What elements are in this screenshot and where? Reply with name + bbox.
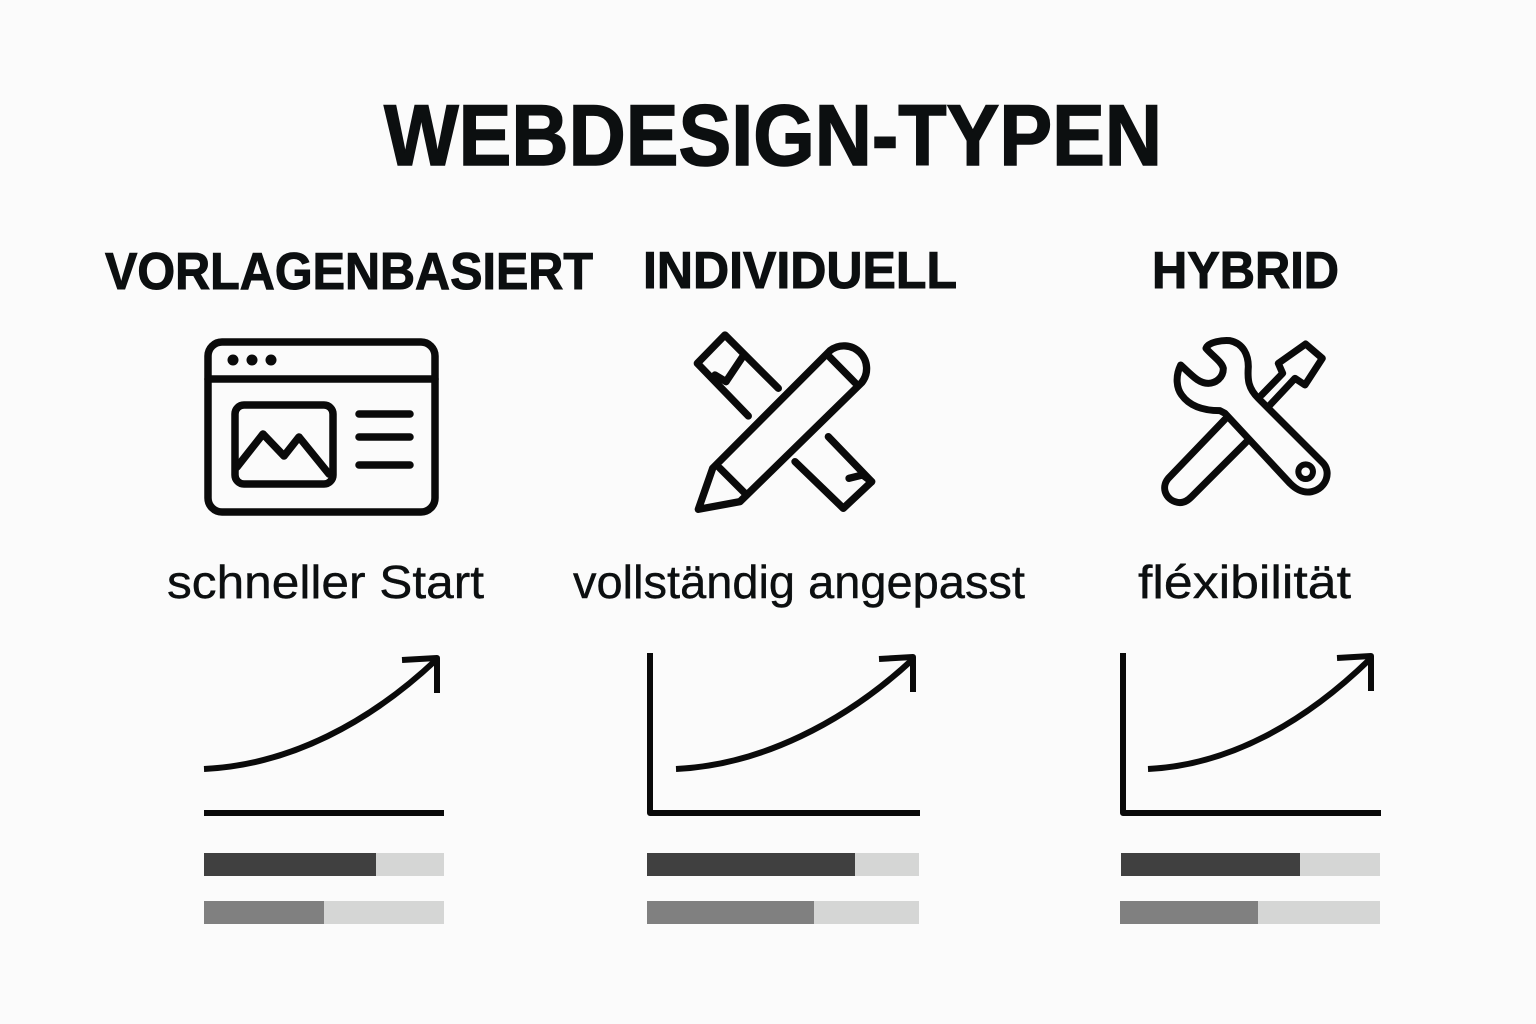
icon: browser window — [208, 342, 435, 512]
bar: cost — [1120, 901, 1380, 924]
heading: individuell: INDIVIDUELL — [643, 242, 957, 300]
icon: wrench and screwdriver — [1165, 341, 1327, 503]
icon: pencil and ruler — [697, 335, 872, 509]
label: vollständig angepasst: vollständig angepasst — [573, 556, 1025, 608]
label: schneller start: schneller Start — [167, 556, 484, 608]
chart: growth curve — [204, 658, 444, 813]
title: WEBDESIGN-TYPEN — [384, 88, 1162, 184]
bar: speed — [1121, 853, 1380, 876]
bar: speed — [204, 853, 444, 876]
bar: speed — [647, 853, 919, 876]
bar: cost — [204, 901, 444, 924]
panel: hybrid — [1120, 242, 1381, 924]
panel: individuell — [573, 242, 1025, 924]
bar: cost — [647, 901, 919, 924]
chart: growth curve — [1123, 653, 1381, 813]
panel: vorlagenbasiert — [105, 243, 593, 924]
heading: hybrid: HYBRID — [1152, 242, 1339, 300]
label: flexibilität: fléxibilität — [1138, 556, 1351, 608]
heading: vorlagenbasiert: VORLAGENBASIERT — [105, 243, 593, 301]
chart: growth curve — [650, 653, 920, 813]
